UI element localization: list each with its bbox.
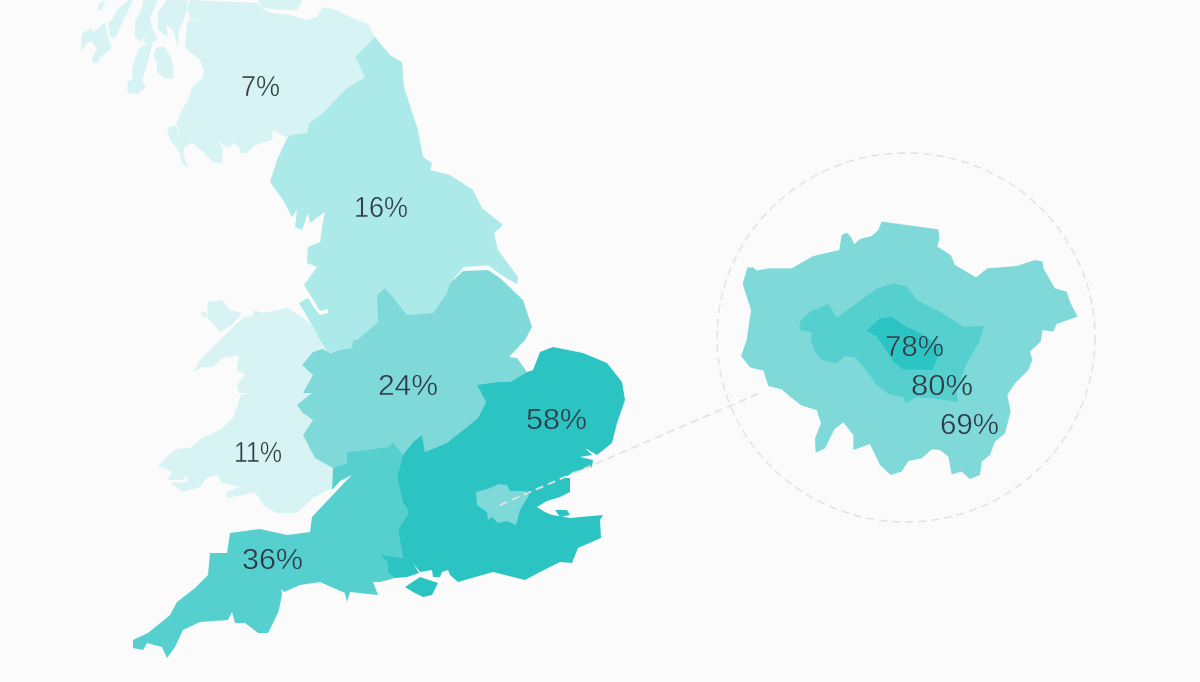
Humber estuary	[463, 266, 517, 285]
label: North 16%: 16%	[354, 192, 408, 224]
London central zone	[867, 317, 942, 370]
London outer zone	[741, 222, 1078, 479]
London middle zone	[799, 283, 984, 403]
label: East 58%: 58%	[526, 404, 587, 436]
London inset map	[741, 222, 1078, 479]
dashed callout line	[500, 392, 762, 505]
region: London on map	[476, 484, 529, 525]
label: Wales 11%: 11%	[234, 437, 282, 469]
label: Scotland 7%: 7%	[241, 71, 280, 103]
region: Midlands	[297, 270, 532, 468]
label: outer London 69%: 69%	[940, 409, 999, 441]
dashed callout circle	[717, 153, 1095, 522]
label: South West 36%: 36%	[242, 544, 303, 576]
region: East and South East	[380, 347, 625, 597]
label: Midlands 24%: 24%	[378, 370, 438, 402]
region: South West	[133, 442, 409, 658]
label: central London 78%: 78%	[885, 331, 944, 363]
region: Wales	[158, 300, 340, 513]
label: inner London 80%: 80%	[911, 370, 973, 402]
region: Scotland	[81, 0, 375, 168]
region: North of England	[270, 37, 518, 353]
